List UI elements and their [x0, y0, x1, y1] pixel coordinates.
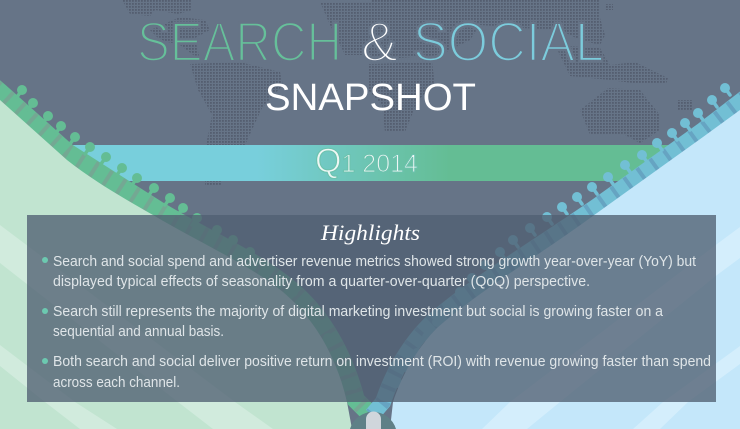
- zipper pull: [350, 412, 396, 429]
- title word: SEARCH: SEARCH: [137, 10, 342, 73]
- left light green panel: [0, 100, 352, 429]
- right zipper tape: [372, 97, 740, 415]
- bullet 2: [42, 304, 664, 340]
- right light blue panel: [391, 110, 740, 429]
- bullet 1: [42, 254, 696, 290]
- bullet 2: sequential and annual basis.: [53, 324, 224, 340]
- date band: [73, 145, 680, 181]
- right zipper in blue: [372, 88, 740, 415]
- dotted world map: [122, 0, 692, 186]
- left zipper in green: [0, 87, 368, 412]
- title: [137, 10, 604, 73]
- bullet 3: [42, 354, 711, 391]
- date label: Q1 2014: [315, 142, 418, 180]
- bullet 3: across each channel.: [53, 375, 180, 391]
- bullet 1: Search and social spend and advertiser revenue metrics showed strong growth year-over-year (YoY) but: [53, 254, 696, 270]
- left zipper tape: [0, 87, 368, 412]
- subtitle: SNAPSHOT: [265, 77, 476, 119]
- title word: ampersand: &: [361, 10, 398, 73]
- title word: SOCIAL: SOCIAL: [413, 10, 604, 73]
- zipper pull handle: [366, 412, 381, 429]
- left zipper teeth: [17, 90, 354, 388]
- panel: highlights: [27, 215, 716, 402]
- bullet 3: Both search and social deliver positive return on investment (ROI) with revenue growing faster than spend: [53, 354, 711, 370]
- bullet 1: displayed typical effects of seasonality from a quarter-over-quarter (QoQ) perspective.: [53, 274, 590, 290]
- right zipper teeth: [398, 88, 730, 386]
- bullet 2: Search still represents the majority of digital marketing investment but social is growing faster on a: [53, 304, 664, 320]
- highlights heading: Highlights: [320, 220, 420, 245]
- zipper pull base: [350, 412, 396, 429]
- panel background: [27, 215, 716, 402]
